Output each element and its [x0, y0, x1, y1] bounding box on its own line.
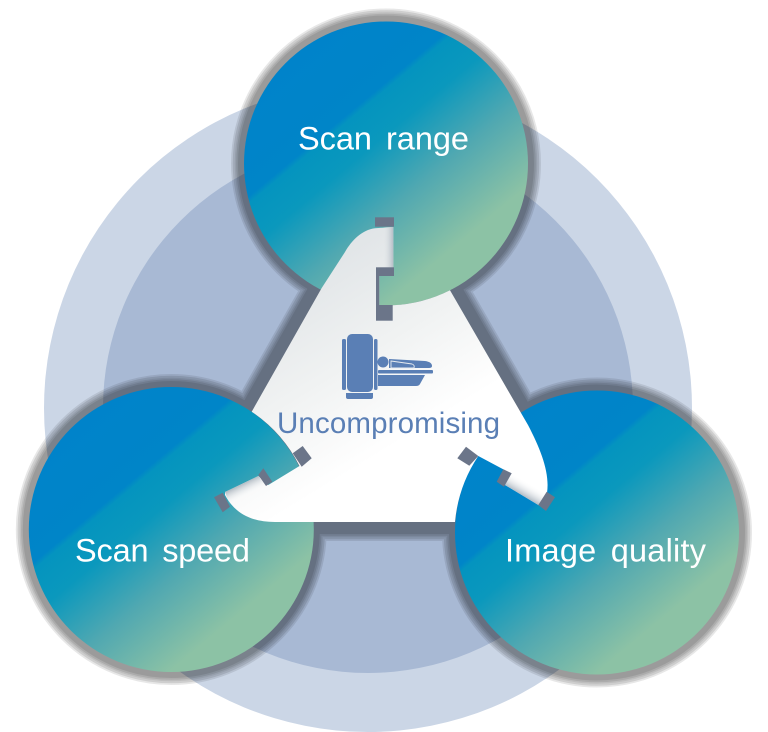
label: scan speed: Scan speed	[75, 533, 250, 569]
tabs: top notch	[375, 217, 394, 321]
label: scan range: Scan range	[298, 120, 469, 156]
background: outer ring	[44, 84, 692, 732]
panel: central rounded triangle	[225, 227, 548, 522]
tabs: left notch	[214, 446, 312, 512]
notch shading: right	[505, 473, 547, 506]
notch shading: left	[225, 476, 266, 506]
gantry base	[346, 393, 373, 399]
circle: scan speed	[29, 387, 314, 672]
table top	[378, 370, 433, 374]
patient body	[389, 359, 432, 368]
notch shading: top	[383, 227, 393, 268]
scanner gantry	[347, 334, 373, 392]
table body	[378, 375, 425, 386]
label: uncompromising: Uncompromising	[277, 407, 500, 440]
gantry side right	[374, 339, 378, 390]
gantry side left	[342, 339, 346, 390]
icon: CT scanner with patient	[342, 334, 433, 399]
circle: image quality	[455, 390, 739, 674]
patient arm	[391, 361, 414, 368]
circle: scan range	[244, 22, 528, 306]
tabs: right notch	[457, 447, 555, 511]
patient head	[378, 356, 388, 368]
background: inner ring	[103, 143, 633, 673]
label: image quality: Image quality	[505, 533, 707, 569]
